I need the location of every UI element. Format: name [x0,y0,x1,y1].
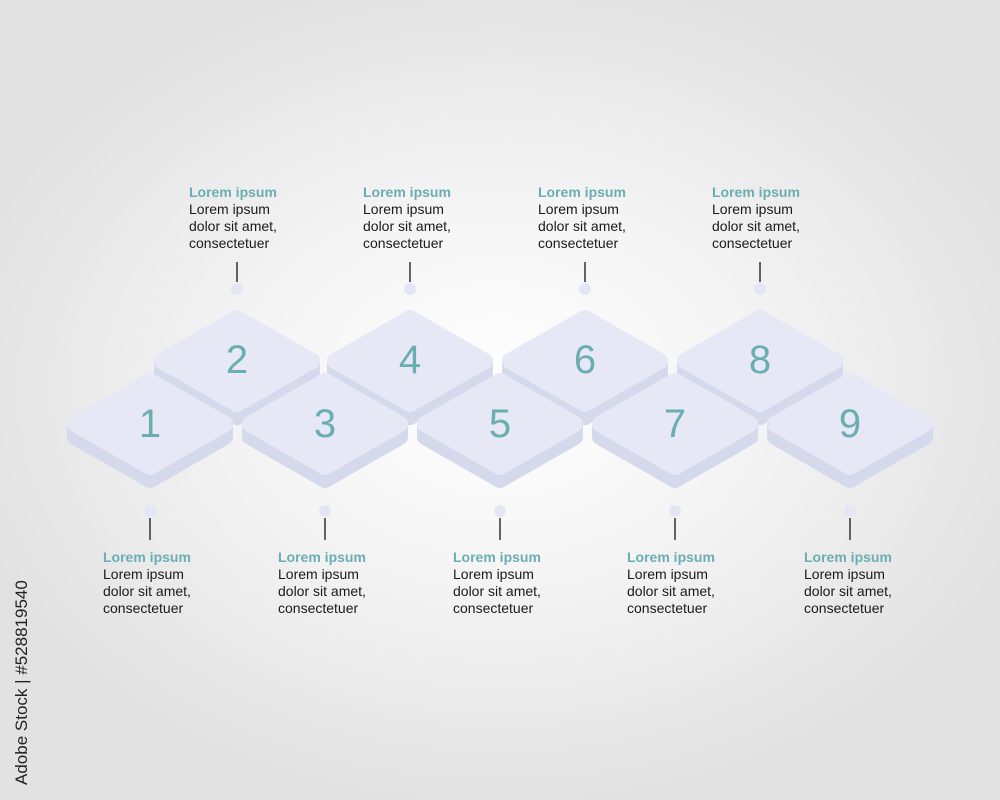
label 6: Lorem ipsum [538,201,619,217]
label 5 [453,549,541,616]
label 6: Lorem ipsum [538,184,626,200]
label 8: dolor sit amet, [712,218,800,234]
label 4 [363,184,451,251]
label 5: dolor sit amet, [453,583,541,599]
label 5: consectetuer [453,600,533,616]
numbers: 4 [399,338,421,382]
label 7: consectetuer [627,600,707,616]
even tiles [162,318,835,417]
label 5: Lorem ipsum [453,566,534,582]
numbers: 9 [839,402,861,446]
label 3 [278,549,366,616]
label 6: consectetuer [538,235,618,251]
label 7: Lorem ipsum [627,549,715,565]
label 4: Lorem ipsum [363,184,451,200]
numbers: 3 [314,402,336,446]
side watermark id: Adobe Stock | #528819540 [12,580,31,785]
label 2: consectetuer [189,235,269,251]
label 9: Lorem ipsum [804,549,892,565]
numbers: 2 [226,338,248,382]
label 9: consectetuer [804,600,884,616]
label 4: Lorem ipsum [363,201,444,217]
label 1: dolor sit amet, [103,583,191,599]
label 5: Lorem ipsum [453,549,541,565]
odd tiles [75,381,925,480]
label 4: consectetuer [363,235,443,251]
numbers: 5 [489,402,511,446]
label 8: Lorem ipsum [712,201,793,217]
numbers: 6 [574,338,596,382]
label 1 [103,549,191,616]
numbers: 8 [749,338,771,382]
label 8: Lorem ipsum [712,184,800,200]
label 2: Lorem ipsum [189,184,277,200]
label 1: Lorem ipsum [103,566,184,582]
label 6: dolor sit amet, [538,218,626,234]
label 7: dolor sit amet, [627,583,715,599]
numbers: 7 [664,402,686,446]
label 1: Lorem ipsum [103,549,191,565]
label 3: consectetuer [278,600,358,616]
label 7: Lorem ipsum [627,566,708,582]
label 2: Lorem ipsum [189,201,270,217]
label 2 [189,184,277,251]
label 9: Lorem ipsum [804,566,885,582]
label 8: consectetuer [712,235,792,251]
label 8 [712,184,800,251]
dots [144,283,856,517]
label 3: dolor sit amet, [278,583,366,599]
numbers: 1 [139,402,161,446]
label 9: dolor sit amet, [804,583,892,599]
label 6 [538,184,626,251]
label 7 [627,549,715,616]
label 4: dolor sit amet, [363,218,451,234]
label 3: Lorem ipsum [278,566,359,582]
connectors [150,262,850,540]
label 2: dolor sit amet, [189,218,277,234]
label 1: consectetuer [103,600,183,616]
label 3: Lorem ipsum [278,549,366,565]
label 9 [804,549,892,616]
numbers [139,338,861,446]
